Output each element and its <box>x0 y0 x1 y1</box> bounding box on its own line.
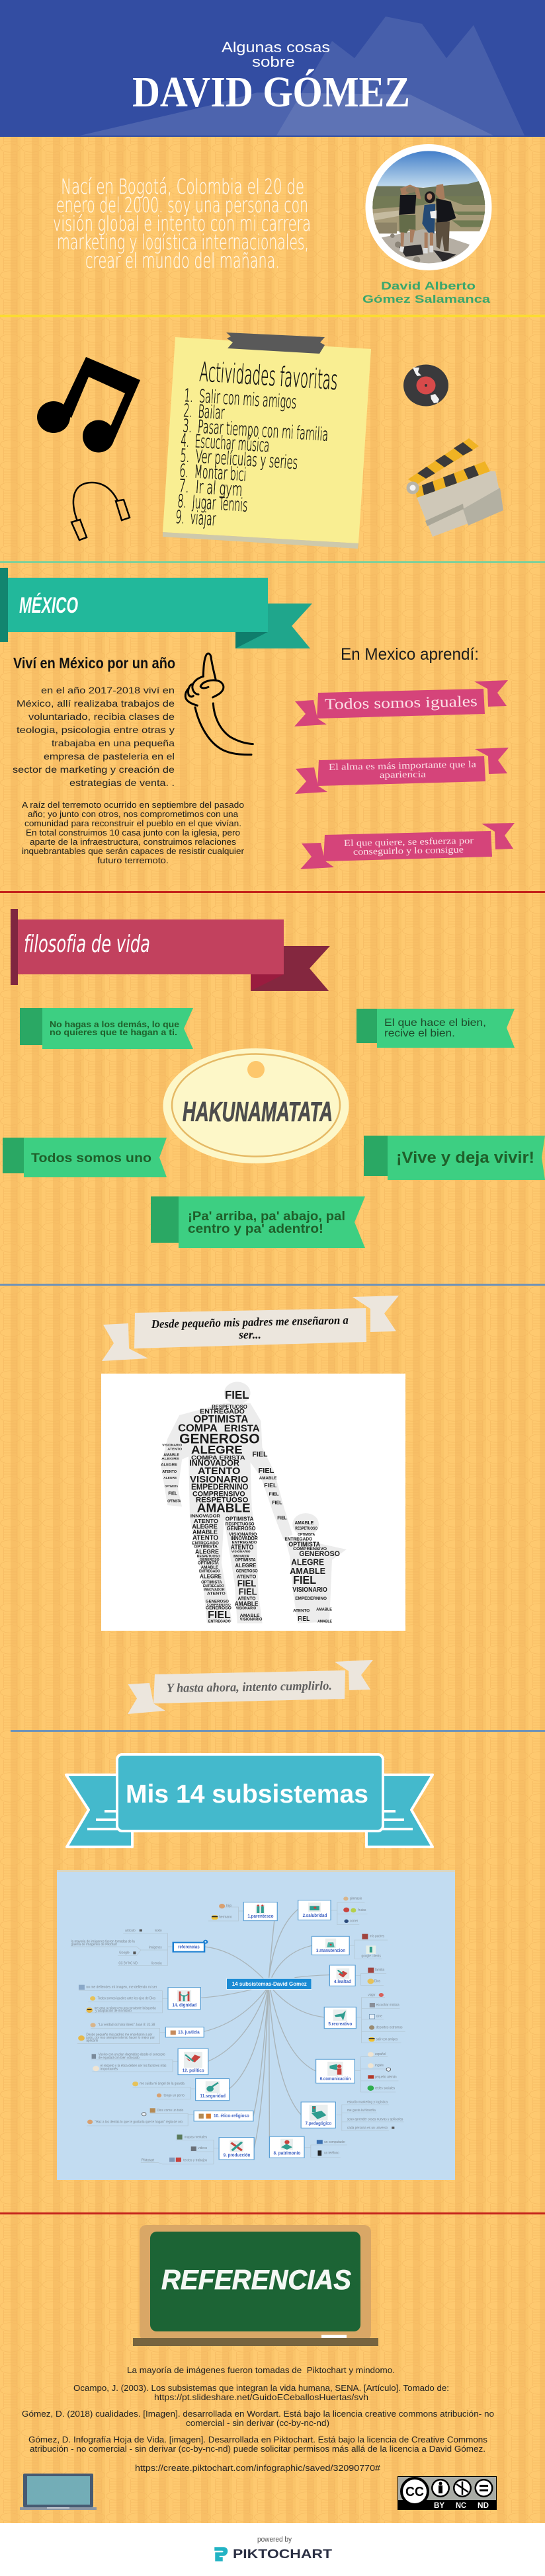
mind map leaf labels: me cuida mi ángel de la guarda <box>140 2082 185 2086</box>
word cloud image: father and child: VISIONARIO <box>229 1532 257 1537</box>
ribbon: El que hace el bien: El que hace el bien, <box>384 1017 486 1029</box>
text block: México year: voluntariado, recibia clases de <box>28 711 175 722</box>
activities list: 3. Pasar tiempo con mi familia <box>183 416 329 446</box>
text block: earthquake: año; yo junto con otros, nos comprometimos con una <box>28 809 239 819</box>
text block: introduction: marketing y logística internacionales, <box>57 231 309 254</box>
word cloud image: father and child: ALEGRE <box>291 1557 324 1567</box>
mind map leaf labels: Desde pequeño mis padres me enseñaron a ser <box>86 2033 152 2037</box>
word cloud image: father and child: ALEGRE <box>161 1457 179 1460</box>
mind map subsystem nodes <box>165 1900 356 2160</box>
word cloud image: father and child: ALEGRE <box>200 1573 222 1580</box>
activities list: 7. Ir al gym <box>179 476 243 500</box>
icon: pointing hand <box>185 654 253 755</box>
ribbon: Desde pequeño <box>102 1296 399 1361</box>
word cloud image: father and child: OPTIMISTA <box>194 1545 218 1549</box>
mind map node labels: 6.comunicación <box>320 2076 351 2082</box>
mind map leaf labels: tengo un perro <box>163 2094 185 2097</box>
name caption: David Alberto <box>381 280 476 292</box>
word cloud image: father and child: OPTIMISTA <box>198 1561 220 1565</box>
mind map leaf labels: hijo <box>226 1904 232 1908</box>
word cloud image: father and child: AMABLE <box>235 1600 259 1608</box>
word cloud image: father and child: GENEROSO <box>236 1569 258 1573</box>
activities list: 2. Bailar <box>183 401 226 424</box>
text block: references: comercial - sin derivar (cc-by-nc-nd) <box>186 2419 329 2428</box>
ribbon: Pa' arriba: ¡Pa' arriba, pa' abajo, pal <box>188 1210 345 1224</box>
word cloud image: father and child: INNOVADOR <box>190 1514 220 1518</box>
word cloud image: father and child: GENEROSO <box>206 1606 231 1611</box>
mind map leaf labels: Todos somos iguales ante los ojos de Dios <box>98 1997 155 2000</box>
text block: references: https://pt.slideshare.net/GuidoECeballosHuertas/svh <box>154 2393 368 2402</box>
word cloud image: father and child: AMABLE <box>163 1453 180 1458</box>
word cloud image: father and child: VISIONARIO <box>162 1444 183 1447</box>
heading banner: México <box>0 568 312 648</box>
woman <box>425 191 435 203</box>
word cloud image: father and child: ERISTA <box>224 1423 260 1434</box>
text block: introduction: crear el mundo del mañana. <box>85 249 280 273</box>
word cloud image: father and child: COMPRENSIVO <box>192 1490 245 1499</box>
ribbon: Pa' arriba <box>151 1196 365 1248</box>
mind map leaf labels: y adaptación de mi mismo <box>95 2010 132 2013</box>
word cloud image: father and child: OPTIMISTA <box>167 1499 181 1504</box>
mind map central node <box>227 1978 312 1989</box>
word cloud image: father and child: RESPETUOSO <box>196 1496 248 1504</box>
ribbon: Todos somos uno <box>3 1138 167 1177</box>
ribbon: Y hasta ahora <box>128 1660 373 1714</box>
mind map node labels: 7.pedagógico <box>306 2121 331 2126</box>
name caption: Gómez Salamanca <box>362 293 491 305</box>
word cloud image: father and child: ALEGRE <box>191 1444 243 1456</box>
word cloud image: father and child: INNOVADOR <box>204 1588 225 1592</box>
ribbon: No hagas a los demás <box>20 1008 193 1049</box>
word cloud image: father and child: OPTIMISTA <box>298 1533 315 1537</box>
mind map leaf labels: redes sociales <box>375 2087 395 2090</box>
tape <box>226 332 325 354</box>
ribbon: El alma: El alma es más importante que la <box>329 760 477 773</box>
mind map leaf labels: texto <box>155 1929 162 1933</box>
mind map leaf labels: Piktotart <box>142 2159 155 2162</box>
mind map leaf labels: el respeto y la ética deben ser los factores más <box>101 2064 167 2068</box>
mind map leaf labels: cine <box>376 2015 383 2018</box>
word cloud image: father and child: ATENTO <box>237 1596 256 1601</box>
text block: México year <box>13 685 175 788</box>
activities list: 4. Escuchar música <box>181 430 270 456</box>
word cloud image: father and child: AMABLE <box>259 1476 276 1481</box>
text block: México year: sector de marketing y creación de <box>13 764 175 775</box>
ribbon: El alma <box>295 748 509 794</box>
heading badge: Mis 14 subsistemas <box>66 1754 433 1847</box>
footer: powered by Piktochart: PIKTOCHART <box>233 2548 332 2561</box>
word cloud image: father and child: ATENTO <box>237 1574 257 1579</box>
word cloud image: father and child: FIEL <box>259 1467 274 1474</box>
mind map leaf labels: Dios como un todo <box>157 2109 184 2113</box>
word cloud image: father and child: AMABLE <box>240 1613 260 1618</box>
ribbon: Pa' arriba: centro y pa' adentro! <box>188 1222 323 1236</box>
word cloud image: father and child: AMABLE <box>317 1620 332 1623</box>
mind map leaf labels: me gusta la filosofía <box>347 2109 376 2113</box>
ribbon: Vive y deja vivir <box>364 1136 545 1180</box>
word cloud image: father and child: VISIONARIO <box>190 1474 248 1485</box>
text block: earthquake: aparte de la infraestructura, construimos relaciones <box>30 837 237 847</box>
mind map leaf labels: soso aprender cosas nuevas y aplicarlas <box>347 2118 403 2121</box>
mind map leaf labels: articulo <box>125 1929 136 1933</box>
word cloud image: father and child: OPTIMISTA <box>165 1485 179 1488</box>
text block: México year: empresa de pasteleria en el <box>44 751 175 761</box>
text block: México year: México, allí realizaba trabajos de <box>17 698 175 709</box>
word cloud image: father and child: AMABLE <box>316 1608 332 1612</box>
badge: Hakunamatata: HAKUNAMATATA <box>183 1096 333 1127</box>
activities list: 8. Jugar Tennis <box>177 491 248 516</box>
mind map leaf labels: mis padres <box>370 1935 384 1938</box>
mind map node labels: 8. patrimonio <box>274 2150 300 2156</box>
man 1 <box>400 184 421 200</box>
text block: earthquake <box>22 800 245 865</box>
name caption <box>362 280 491 305</box>
word cloud image: father and child: GENEROSO <box>227 1526 256 1532</box>
word cloud image: father and child: ENTREGADO <box>192 1542 219 1546</box>
word cloud image: father and child: INNOVADOR <box>233 1555 249 1559</box>
mind map node labels: 12. político <box>183 2068 204 2073</box>
ribbon: Todos somos uno: Todos somos uno <box>31 1151 151 1165</box>
mind map node labels: 14. dignidad <box>173 2002 196 2008</box>
word cloud image: father and child: ATENTO <box>198 1465 241 1476</box>
mind map leaf labels: estudio marketing y logística <box>347 2101 388 2104</box>
text block: earthquake: En total construimos 10 casa junto con la iglesia, pero <box>26 828 240 838</box>
icon: vinyl record <box>403 365 448 406</box>
man 2 <box>435 184 445 200</box>
ribbon: Y hasta ahora: Y hasta ahora, intento cumplirlo. <box>167 1679 332 1696</box>
ribbon: Vive y deja vivir: ¡Vive y deja vivir! <box>396 1149 534 1167</box>
portrait photo <box>365 144 492 270</box>
word cloud image: father and child: FIEL <box>239 1586 257 1596</box>
text block: introduction: Nací en Bogotá, Colombia el 20 de <box>61 175 304 199</box>
word cloud image: father and child <box>101 1374 405 1631</box>
ribbon: Desde pequeño: Desde pequeño mis padres me enseñaron a <box>151 1313 349 1331</box>
mind map leaf labels: Dios <box>374 1980 380 1983</box>
word cloud image: father and child: FIEL <box>269 1491 279 1497</box>
mind map leaf labels: Vuelvo con un plan dogmático desde el concepto <box>99 2053 165 2056</box>
mind map leaf labels: la mayoria de imágenes fueron tomadas de la <box>71 1940 135 1943</box>
mind map leaf labels: un computador <box>324 2140 345 2144</box>
ribbon: El que quiere <box>300 823 515 869</box>
word cloud image: father and child: OPTIMISTA <box>235 1557 256 1563</box>
mind map node labels: referencias <box>178 1944 200 1949</box>
word cloud image: father and child: ATENTO <box>192 1534 218 1542</box>
word cloud image: father and child: GENEROSO <box>200 1558 220 1562</box>
mind map leaf labels: videos <box>198 2146 207 2150</box>
word cloud image: father and child: ATENTO <box>207 1592 226 1596</box>
mind map leaf labels: español <box>375 2052 386 2056</box>
ribbon: No hagas a los demás: No hagas a los demás, lo que <box>50 1020 179 1029</box>
word cloud image: father and child: GENEROSO <box>206 1600 229 1604</box>
chalkboard: Referencias <box>133 2225 378 2346</box>
mind map leaf labels: aplicarlo <box>86 2039 99 2043</box>
word cloud image: father and child: ENTREGADO <box>208 1620 231 1623</box>
text block: México year: en el año 2017-2018 viví en <box>41 685 175 695</box>
word cloud image: father and child: FIEL <box>168 1491 177 1497</box>
mind map leaf labels: pequeño alemán <box>375 2076 397 2079</box>
mind map leaf labels: google clients <box>362 1955 381 1958</box>
word cloud image: father and child: ENTREGADO <box>232 1541 257 1545</box>
panel: header <box>0 0 545 137</box>
mind map central node: 14 subsistemas-David Gomez <box>232 1981 307 1987</box>
mind map connectors <box>200 1909 329 2148</box>
word cloud image: father and child: ALEGRE <box>235 1563 257 1569</box>
mind map leaf icons <box>78 1896 394 2162</box>
mind map leaf labels: "La verdad os hará libres" Juan 8: 31-38 <box>98 2023 155 2027</box>
chalkboard: Referencias: REFERENCIAS <box>161 2264 351 2295</box>
mind map leaf labels: no me defiendes mi imagen, me defiendo mi ser <box>86 1986 157 1989</box>
mind map node labels: 5.recreativo <box>328 2021 352 2027</box>
heading: En Mexico aprendí: En Mexico aprendí: <box>341 645 479 664</box>
mind map branch lines <box>71 1902 405 2164</box>
footer: powered by Piktochart: powered by <box>257 2536 292 2544</box>
word cloud image: father and child: INNOVADOR <box>189 1458 239 1468</box>
mind map leaf labels: galería de imágenes de Piktotart <box>71 1943 117 1947</box>
word cloud image: father and child: RESPETUOSO <box>295 1527 317 1531</box>
mind map leaf labels: textos y trabajos <box>183 2159 207 2162</box>
ribbon: El que hace el bien <box>356 1009 515 1048</box>
mind map leaf labels: Google <box>119 1951 130 1955</box>
ribbon: No hagas a los demás: no quieres que te hagan a ti. <box>50 1028 177 1037</box>
mountains illustration <box>80 17 524 136</box>
heading banner: México: MÉXICO <box>19 593 78 618</box>
word cloud image: father and child: GENEROSO <box>179 1431 260 1447</box>
text block: introduction: enero del 2000. soy una persona con <box>56 194 308 217</box>
icon: laptop <box>20 2474 97 2510</box>
word cloud image: father and child: VISIONARIO <box>240 1618 263 1622</box>
mind map leaf labels: un teléfono <box>324 2152 339 2155</box>
word cloud image: father and child: FIEL <box>277 1515 287 1521</box>
icon: creative commons licence <box>398 2476 497 2510</box>
icon: creative commons licence: ND <box>478 2501 489 2510</box>
text block: earthquake: futuro terremoto. <box>97 855 169 865</box>
mind map leaf labels: escuchar música <box>376 2004 399 2007</box>
mind map leaf labels: salir con amigos <box>376 2038 398 2041</box>
mind map leaf labels: cada persona es un universo <box>347 2127 388 2130</box>
word cloud image: father and child: ENTREGADO <box>199 1569 220 1573</box>
ribbon: El alma: apariencia <box>380 770 427 781</box>
text block: references: La mayoría de imágenes fueron tomadas de Piktochart y mindomo. <box>127 2366 395 2375</box>
word cloud image: father and child: FIEL <box>237 1578 256 1588</box>
icon: music notes <box>37 357 140 452</box>
word cloud image: father and child: AMABLE <box>192 1529 218 1535</box>
word cloud image: father and child: VISIONARIO <box>292 1586 327 1593</box>
mind map leaf labels: licencia <box>151 1962 162 1965</box>
ribbon: El que quiere: conseguirlo y lo consigue <box>353 845 464 857</box>
mind map leaf labels: familia <box>375 1969 385 1972</box>
word cloud image: father and child: FIEL <box>208 1609 231 1621</box>
activities list: 9. viajar <box>175 507 217 530</box>
word cloud image: father and child: EMPEDERNINO <box>295 1596 327 1601</box>
word cloud image: father and child: FIEL <box>225 1388 249 1401</box>
mind map node labels: 11.seguridad <box>200 2093 226 2099</box>
ribbon: Todos somos iguales: Todos somos iguales <box>325 693 478 713</box>
word cloud image: father and child: FIEL <box>272 1500 282 1506</box>
word cloud image: father and child: ALEGRE <box>161 1463 178 1467</box>
word cloud image: father and child: VISIONARIO <box>236 1606 256 1611</box>
word cloud image: father and child: COMPA <box>178 1423 218 1434</box>
word cloud image: father and child: ATENTO <box>194 1518 218 1524</box>
word cloud image: father and child: FIEL <box>298 1616 310 1622</box>
heading banner: filosofía de vida: filosofia de vida <box>24 931 150 958</box>
word cloud image: father and child: COMPA ERISTA <box>191 1454 245 1461</box>
word cloud image: father and child: RESPETUOSO <box>226 1522 255 1526</box>
word cloud image: father and child: ALEGRE <box>163 1476 177 1479</box>
mind map leaf labels: correr <box>350 1920 358 1923</box>
mind map node labels <box>173 1913 352 2158</box>
word cloud image: father and child: VISIONARIO <box>231 1549 251 1553</box>
ribbon: El que quiere: El que quiere, se esfuerza por <box>344 836 474 849</box>
text block: earthquake: comunidad para reconstruir el pueblo en el que vivían. <box>24 818 241 828</box>
ribbon: El que hace el bien: recive el bien. <box>384 1028 455 1039</box>
activities list <box>175 385 329 530</box>
title: DAVID GÓMEZ <box>132 68 410 116</box>
word cloud image: father and child: GENEROSO <box>299 1550 340 1558</box>
mind map leaf labels: de equidad con bien colocado <box>99 2056 140 2060</box>
ribbon: Todos somos iguales <box>294 680 508 726</box>
word cloud image: father and child: FIEL <box>252 1450 268 1459</box>
word cloud image: father and child: COMPRENSIVO <box>293 1547 327 1551</box>
word cloud image: father and child: ENTREGADO <box>203 1584 224 1588</box>
header kicker text <box>222 39 330 70</box>
mind map leaf labels: importantes <box>101 2068 118 2071</box>
mind map leaf labels: me amo a mismo en una constante búsqueda <box>95 2007 156 2010</box>
text block: México year: teologia, psicologia entre otras y <box>17 724 175 735</box>
word cloud image: father and child: ENTREGADO <box>284 1536 313 1542</box>
icon: Piktochart logo <box>215 2548 228 2561</box>
word cloud image: father and child: COMPRENSIVO <box>207 1603 231 1606</box>
panel: favourite activities note <box>163 332 371 549</box>
icon: creative commons licence: CC <box>405 2485 424 2499</box>
header kicker text: sobre <box>252 54 295 70</box>
word cloud image: father and child: AMABLE <box>294 1520 314 1526</box>
mind map leaf labels: CC BY NC ND <box>118 1962 138 1965</box>
icon: headphones <box>71 483 130 540</box>
mind map node labels: 2.salubridad <box>303 1913 327 1918</box>
word cloud image: father and child: INNOVADOR <box>231 1536 258 1542</box>
text block: introduction <box>53 175 311 273</box>
mind map leaf labels: frutas <box>358 1908 366 1912</box>
icon: creative commons licence: NC <box>456 2501 466 2510</box>
mind map node labels: 9. producción <box>224 2152 250 2158</box>
text block: earthquake: A raíz del terremoto ocurrido en septiembre del pasado <box>22 800 244 810</box>
word cloud image: father and child: AMABLE <box>197 1501 251 1515</box>
text block: references: Ocampo, J. (2003). Los subsistemas que integran la vida humana, SENA. [Artículo]. Tomado de: <box>73 2384 449 2393</box>
text block: references: Gómez, D. (2018) cualidades. [Imagen]. desarrollada en Wordart. Está bajo la licencia creative commons atribución- no <box>22 2409 494 2419</box>
word cloud image: father and child: RESPETUOSO <box>212 1404 247 1410</box>
mind map node icons <box>171 1902 349 2152</box>
mind map node labels: 3.manutencion <box>316 1948 345 1953</box>
word cloud image: father and child: FIEL <box>264 1483 277 1489</box>
text block: references <box>22 2366 494 2473</box>
icon: film clapperboard <box>406 438 503 537</box>
mind map leaf labels: mapas mentales <box>185 2136 207 2139</box>
word cloud image: father and child: ALEGRE <box>195 1548 219 1555</box>
word cloud image: father and child: OPTIMISTA <box>288 1541 320 1548</box>
word cloud image: father and child: ATENTO <box>231 1544 253 1551</box>
mind map leaf labels: inglés <box>375 2064 384 2068</box>
panel: mind map of 14 subsystems <box>57 1870 455 2180</box>
mind map node labels: 4.lealtad <box>334 1979 351 1984</box>
mind map leaf labels: hermano <box>219 1916 232 1919</box>
subheading: Viví en México: Viví en México por un año <box>13 654 175 672</box>
mind map leaf labels: justo, por eso siempre intento hacer lo mejor por <box>86 2036 155 2040</box>
word cloud image: father and child: FIEL <box>293 1574 316 1586</box>
text block: México year: trabajaba en una pequeña <box>52 738 175 748</box>
heading badge: Mis 14 subsistemas: Mis 14 subsistemas <box>126 1780 368 1809</box>
mind map leaf labels: Imágenes <box>149 1946 162 1949</box>
word cloud image: father and child: OPTIMISTA <box>193 1413 248 1425</box>
word cloud image: father and child: OPTIMISTA <box>226 1516 254 1522</box>
note heading: Actividades favoritas <box>198 357 339 396</box>
header kicker text: Algunas cosas <box>222 39 330 56</box>
activities list: 5. Ver películas y series <box>180 446 298 473</box>
word cloud image: father and child: AMABLE <box>201 1566 218 1570</box>
word cloud image: father and child: ALEGRE <box>192 1523 218 1530</box>
activities list: 6. Montar bici <box>179 461 247 485</box>
mind map leaf labels <box>71 1897 403 2162</box>
word cloud image: father and child: RESPETUOSO <box>197 1555 220 1559</box>
ribbon: Desde pequeño: ser... <box>238 1328 261 1341</box>
word cloud image: father and child: ATENTO <box>162 1470 177 1474</box>
text block: México year: estrategias de venta. . <box>69 777 175 788</box>
text block: earthquake: inquebrantables que serán capaces de resistir cualquier <box>22 846 245 856</box>
mind map leaf labels: deportes extremos <box>376 2026 403 2029</box>
mind map leaf labels: "Haz a los demás lo que te gustaría que te hagan" regla de oro <box>95 2121 183 2124</box>
word cloud image: father and child: ENTREGADO <box>200 1408 245 1415</box>
word cloud image: father and child: AMABLE <box>290 1566 325 1576</box>
text block: references: https://create.piktochart.com/infographic/saved/32090770# <box>135 2464 380 2473</box>
word cloud image: father and child: OPTIMISTA <box>201 1581 222 1584</box>
mind map node labels: 13. justicia <box>178 2029 200 2035</box>
mind map leaf labels: viajar <box>368 1994 376 1997</box>
mind map leaf labels: gimnasio <box>350 1897 362 1900</box>
icon: creative commons licence: BY <box>434 2501 444 2510</box>
word cloud image: father and child: ATENTO <box>167 1447 183 1451</box>
word cloud image: father and child: ATENTO <box>293 1608 310 1614</box>
word cloud image: father and child: EMPEDERNINO <box>191 1482 248 1492</box>
text block: references: atribución - no comercial - sin derivar (cc-by-nc-nd) puede solicitar permisos más allá de la licencia a David Gómez. <box>30 2444 485 2454</box>
activities list: 1. Salir con mis amigos <box>184 385 297 413</box>
badge: Hakunamatata <box>163 1048 349 1163</box>
text block: references: Gómez, D. Infografía Hoja de Vida. [imagen]. Desarrollada en Piktochart. Está bajo la licencia de Creative Commons <box>28 2435 487 2444</box>
text block: introduction: visión global e intento con mi carrera <box>53 212 311 236</box>
mind map node labels: 1.parentesco <box>247 1914 274 1919</box>
footer: powered by Piktochart <box>0 2523 545 2576</box>
mind map node labels: 10. ético-religioso <box>214 2113 249 2119</box>
heading banner: filosofía de vida <box>11 909 330 991</box>
